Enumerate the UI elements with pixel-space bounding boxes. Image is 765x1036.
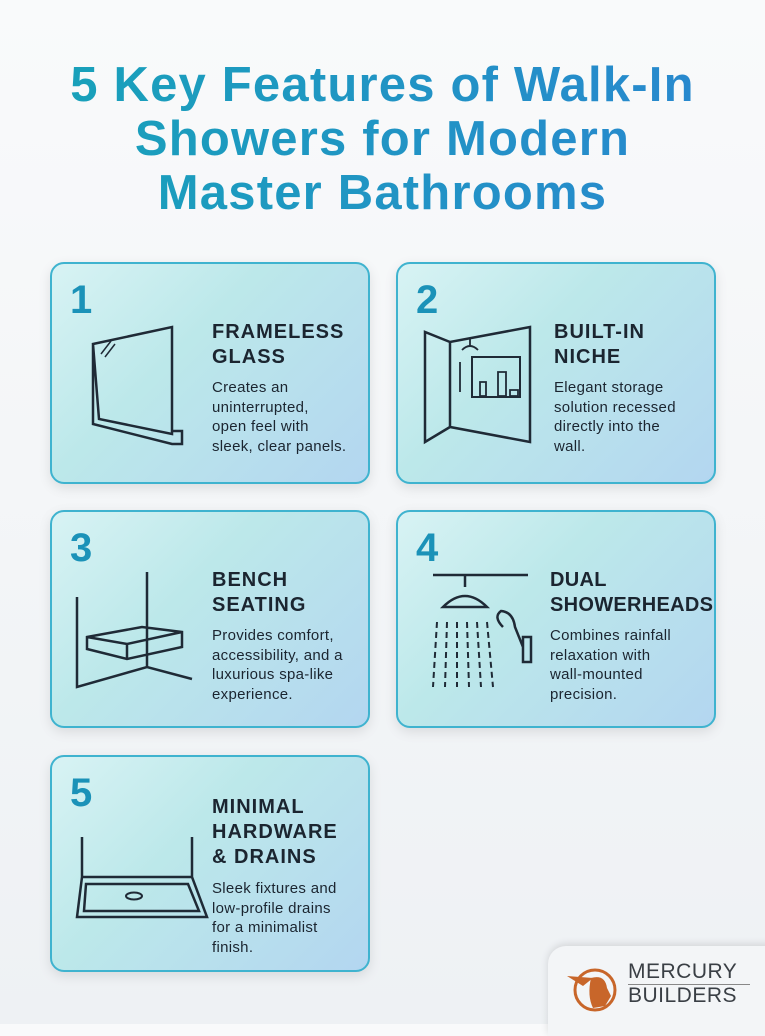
panel: built-in niche (396, 262, 716, 484)
panel: bench seating: 3 (70, 526, 92, 570)
panel: frameless glass: uninterrupted, (212, 398, 309, 416)
panel: frameless glass: GLASS (212, 346, 286, 368)
icon: glass panel (92, 326, 184, 446)
panel: built-in niche: wall. (554, 438, 586, 454)
logo: BUILDERS (628, 984, 737, 1007)
icon: niche (424, 326, 532, 444)
panel: built-in niche: BUILT-IN (554, 321, 645, 343)
icon: mercury head (567, 968, 616, 1012)
panel: frameless glass: open feel with (212, 418, 309, 435)
panel: frameless glass: FRAMELESS (212, 321, 344, 343)
panel: built-in niche: 2 (416, 278, 438, 322)
panel: frameless glass: sleek, clear panels. (212, 438, 346, 454)
panel: dual showerheads (396, 510, 716, 728)
panel: frameless glass (50, 262, 370, 484)
title: Showers for Modern (135, 112, 630, 166)
panel: dual showerheads: DUAL (550, 569, 607, 591)
panel: dual showerheads: 4 (416, 526, 438, 570)
icon: shower tray (76, 837, 209, 918)
icon: showerheads (432, 574, 532, 688)
panel: dual showerheads: precision. (550, 686, 617, 702)
panel: built-in niche: Elegant storage (554, 379, 664, 396)
panel: minimal hardware (50, 755, 370, 972)
title (0, 58, 765, 220)
panel: frameless glass: 1 (70, 278, 92, 322)
panel: bench seating: experience. (212, 686, 293, 702)
panel: bench seating: accessibility, and a (212, 646, 343, 664)
logo: MERCURY (628, 960, 737, 983)
panel: bench seating: SEATING (212, 594, 306, 616)
panel: built-in niche: NICHE (554, 346, 621, 368)
panel: bench seating (50, 510, 370, 728)
icon: bench (76, 572, 192, 689)
panel: built-in niche: solution recessed (554, 398, 676, 416)
panel: dual showerheads: wall-mounted (550, 666, 643, 683)
panel: frameless glass: Creates an (212, 379, 288, 396)
panel: dual showerheads: Combines rainfall (550, 627, 671, 644)
panel: minimal hardware: MINIMAL (212, 796, 305, 818)
panel: minimal hardware: low-profile drains (212, 900, 331, 916)
title: Master Bathrooms (158, 166, 607, 220)
panel: minimal hardware: for a minimalist (212, 919, 318, 936)
panel: minimal hardware: Sleek fixtures and (212, 880, 337, 897)
panel: dual showerheads: relaxation with (550, 646, 650, 664)
panel: dual showerheads: SHOWERHEADS (550, 594, 713, 616)
panel: minimal hardware: & DRAINS (212, 846, 317, 868)
logo (548, 946, 765, 1036)
panel: minimal hardware: HARDWARE (212, 821, 338, 843)
panel: minimal hardware: 5 (70, 771, 92, 815)
title: 5 Key Features of Walk-In (70, 58, 695, 112)
panel: bench seating: Provides comfort, (212, 627, 334, 644)
panel: bench seating: BENCH (212, 569, 288, 591)
panel: bench seating: luxurious spa-like (212, 666, 333, 683)
panel: minimal hardware: finish. (212, 938, 253, 956)
panel: built-in niche: directly into the (554, 418, 660, 435)
